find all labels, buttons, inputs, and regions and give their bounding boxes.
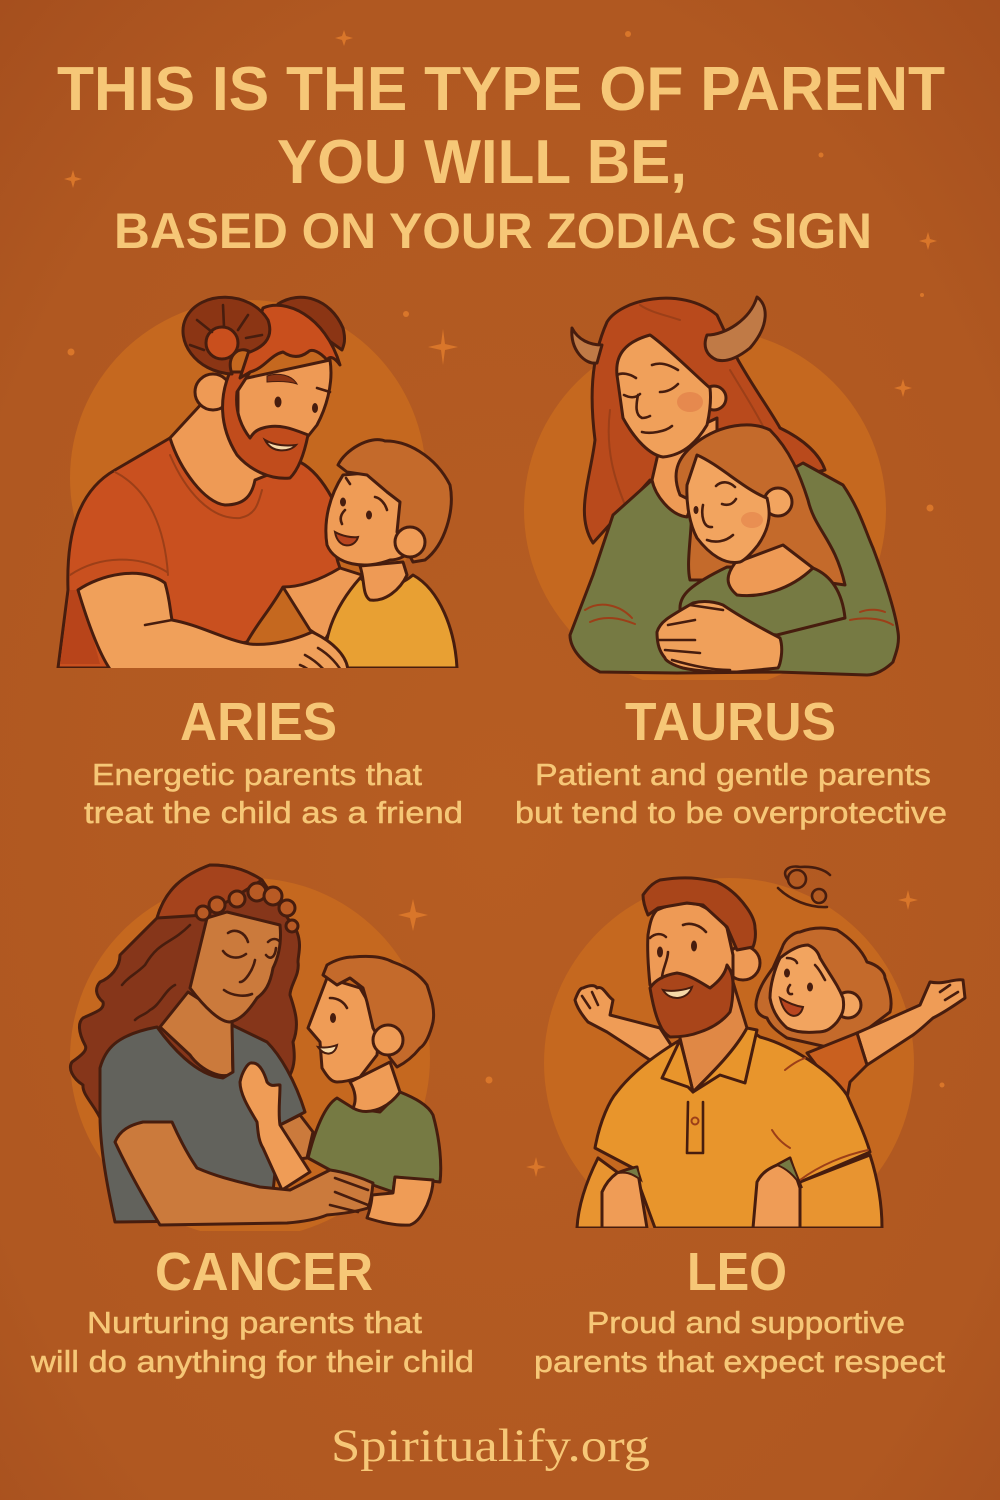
mother's shoulder xyxy=(280,1115,313,1160)
mother's face xyxy=(190,912,281,1022)
decorative stars and dots xyxy=(64,30,944,1177)
father's arms xyxy=(577,1155,882,1228)
horns xyxy=(705,297,765,361)
heading: aries: ARIES xyxy=(180,692,337,752)
daughter's features xyxy=(694,482,763,542)
hair xyxy=(240,305,340,378)
girl's face xyxy=(770,945,844,1032)
girl's left arm xyxy=(575,986,673,1060)
boy's face xyxy=(308,978,380,1082)
boy's face xyxy=(324,473,404,566)
fingers xyxy=(144,619,341,668)
mother's neck xyxy=(652,418,717,517)
girl's features xyxy=(780,958,825,1016)
title xyxy=(57,55,945,259)
heading: cancer: CANCER xyxy=(155,1242,373,1302)
boy's hair xyxy=(338,440,451,562)
title: THIS IS THE TYPE OF PARENT xyxy=(57,55,945,124)
daughter's body xyxy=(680,567,845,635)
curly hair xyxy=(70,865,300,1122)
title: YOU WILL BE, xyxy=(277,128,687,197)
mother's sweater xyxy=(570,463,898,675)
father's forearm and hand xyxy=(76,572,349,668)
heading: leo: LEO xyxy=(687,1242,787,1302)
mother's hands xyxy=(657,602,782,672)
boy's shirt xyxy=(308,1092,441,1192)
description: aries: treat the child as a friend xyxy=(84,795,463,830)
boy's neck xyxy=(350,1062,400,1111)
panel: cancer xyxy=(30,865,474,1379)
beard xyxy=(650,965,733,1037)
mother's face xyxy=(617,335,711,457)
boy's arm xyxy=(367,1177,433,1225)
girl's fingers xyxy=(582,985,958,1008)
father's ear xyxy=(726,946,760,980)
panel: taurus xyxy=(515,297,947,830)
mother's features xyxy=(617,364,703,433)
illustration: cancer mother and son xyxy=(70,865,441,1238)
daughter's neck xyxy=(728,545,813,596)
boy's eyes and mouth xyxy=(335,478,387,545)
description: cancer: will do anything for their child xyxy=(30,1344,474,1379)
father's face xyxy=(648,903,733,1010)
back horn xyxy=(278,297,345,350)
daughter's face xyxy=(687,455,769,563)
beard xyxy=(223,372,308,478)
heading: taurus: TAURUS xyxy=(625,692,836,752)
illustration: leo father and daughter xyxy=(544,867,965,1248)
finger lines xyxy=(658,605,730,670)
panel: leo xyxy=(534,867,965,1379)
girl's hair xyxy=(756,928,891,1050)
sweater creases xyxy=(585,605,893,625)
footer: website: Spiritualify.org xyxy=(331,1420,650,1472)
mother's hair xyxy=(584,298,825,543)
description: aries: Energetic parents that xyxy=(92,757,422,792)
boy's shirt xyxy=(323,575,457,668)
shirt creases xyxy=(70,455,262,575)
description: leo: parents that expect respect xyxy=(534,1344,945,1379)
description: taurus: Patient and gentle parents xyxy=(535,757,931,792)
girl's legs xyxy=(602,1158,802,1228)
horn curl and ribs xyxy=(190,305,262,359)
upper hair xyxy=(157,865,262,918)
panel: aries xyxy=(58,297,463,830)
daughter's ear xyxy=(764,488,792,516)
neck xyxy=(680,982,747,1092)
boy's ear xyxy=(373,1025,403,1055)
mother's fingers xyxy=(330,1178,368,1212)
wavy hair strands xyxy=(122,925,190,1020)
girl's dress xyxy=(807,1033,867,1098)
boy's ear xyxy=(395,527,425,557)
description: taurus xyxy=(515,757,947,830)
mother's ear xyxy=(709,384,728,412)
girl's ear xyxy=(835,992,861,1018)
neck xyxy=(160,992,233,1076)
mother's top xyxy=(100,1025,305,1222)
father's far arm xyxy=(283,568,362,640)
polo shirt xyxy=(595,1028,870,1228)
boy's neck xyxy=(360,562,407,600)
boy's features xyxy=(318,998,347,1054)
illustration: aries father and son xyxy=(58,297,457,684)
description: leo xyxy=(534,1305,945,1379)
mother's arm xyxy=(115,1122,373,1225)
raised hand xyxy=(240,1063,310,1190)
description: aries xyxy=(84,757,463,830)
cancer glyph xyxy=(778,867,830,907)
ram horn xyxy=(183,297,270,374)
collar xyxy=(662,1028,757,1092)
title: BASED ON YOUR ZODIAC SIGN xyxy=(114,203,872,259)
description: cancer xyxy=(30,1305,474,1379)
father's face xyxy=(238,360,331,440)
father's hair xyxy=(643,878,755,950)
father's features xyxy=(650,924,706,998)
placket xyxy=(687,1058,868,1180)
mother's features xyxy=(223,931,280,996)
flower crown xyxy=(196,883,298,932)
father's ear xyxy=(195,374,231,410)
description: taurus: but tend to be overprotective xyxy=(515,795,947,830)
father's neck xyxy=(169,405,268,506)
father's eyes and mouth xyxy=(265,374,330,450)
lower shirt shade xyxy=(60,590,100,664)
description: leo: Proud and supportive xyxy=(587,1305,905,1340)
girl's right arm xyxy=(857,980,965,1065)
boy's hair xyxy=(323,956,434,1067)
hair strands xyxy=(609,305,765,505)
daughter's hair xyxy=(676,425,845,585)
shirt xyxy=(58,438,340,668)
description: cancer: Nurturing parents that xyxy=(87,1305,422,1340)
illustration: taurus mother and daughter xyxy=(524,297,898,691)
